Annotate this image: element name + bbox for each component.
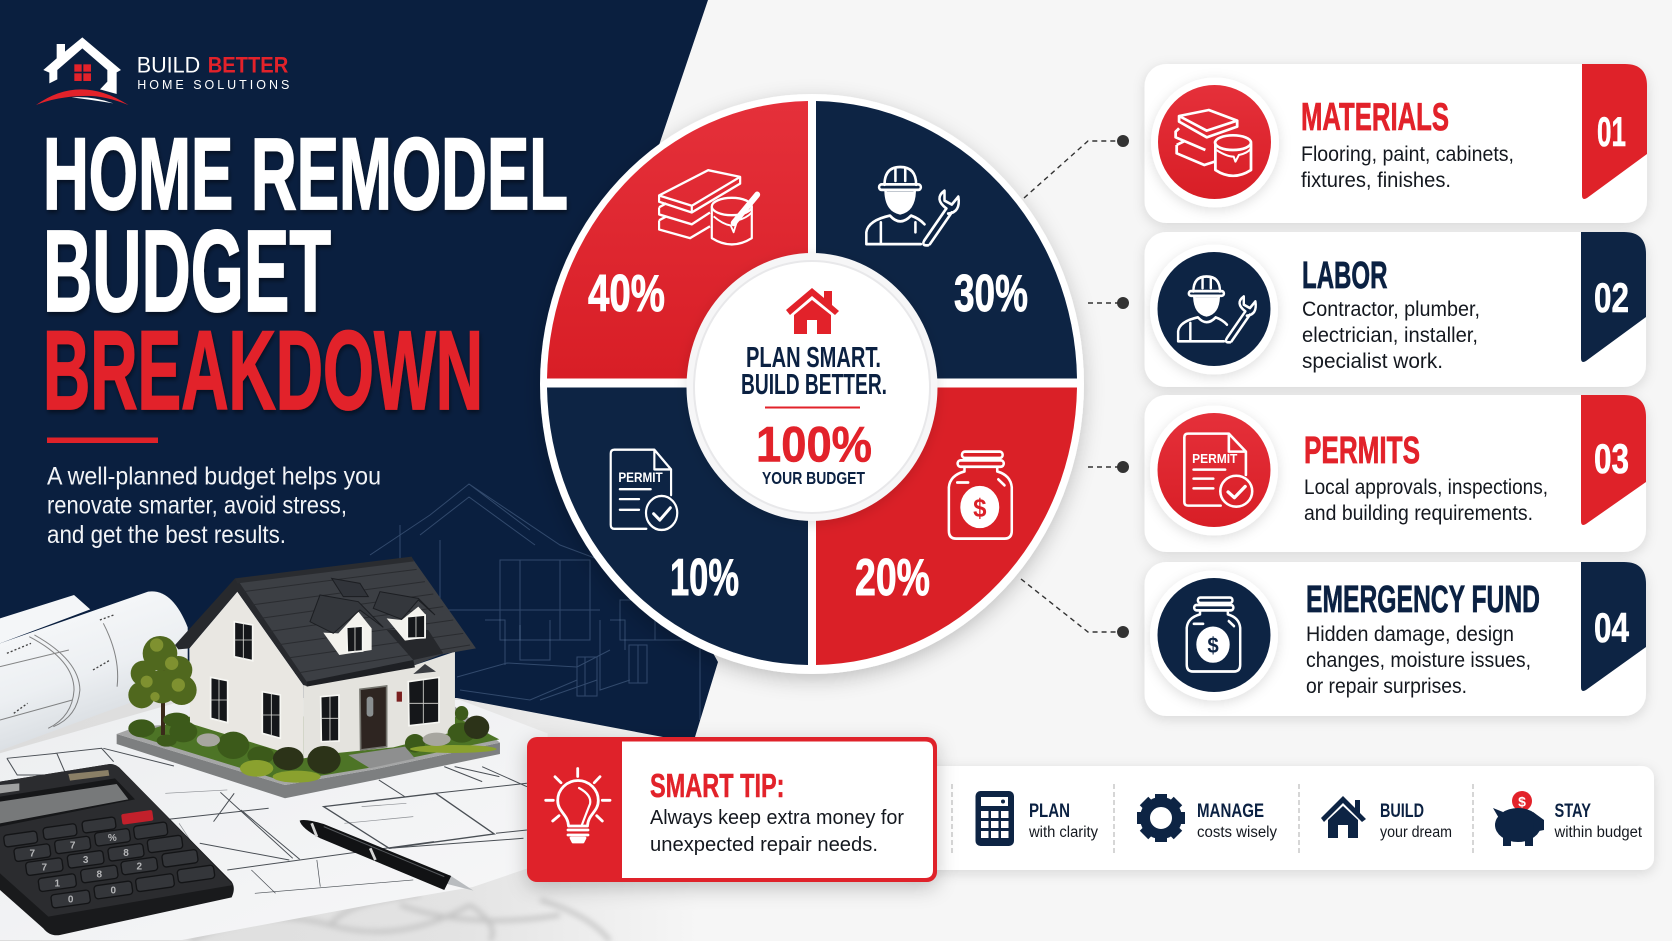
- title: BREAKDOWN: [43, 308, 483, 433]
- logo: HOME SOLUTIONS: [137, 78, 289, 92]
- item: plan: [976, 791, 1098, 846]
- subtitle: A well-planned budget helps you: [47, 462, 381, 490]
- description: electrician, installer,: [1302, 323, 1478, 347]
- brand name: BUILD: [137, 52, 200, 77]
- item: manage: [1137, 794, 1277, 842]
- description: [1302, 297, 1480, 373]
- segment: labor 30%: [816, 101, 1077, 378]
- slogan: BUILD BETTER.: [741, 369, 887, 401]
- calculator: 8: [123, 848, 129, 859]
- calculator: %: [108, 833, 117, 844]
- number ribbon 01: [1582, 64, 1647, 199]
- item: stay: [1493, 791, 1643, 846]
- tip text: unexpected repair needs.: [650, 833, 878, 856]
- subtitle: renovate smarter, avoid stress,: [47, 492, 347, 520]
- item: stay: STAY: [1554, 800, 1591, 822]
- panel: materials: [1144, 64, 1647, 223]
- icon: savings jar: [949, 452, 1012, 539]
- photo: blueprints, house model, calculator and pen: [0, 557, 548, 940]
- calculator: 0: [111, 886, 117, 897]
- connector: labor: [1088, 297, 1129, 309]
- icon badge: permits: PERMIT: [1192, 451, 1237, 466]
- title: HOME REMODEL: [43, 117, 568, 231]
- rolled blueprints: [0, 591, 188, 751]
- panel: emergency fund: [1144, 562, 1646, 716]
- heading: LABOR: [1302, 255, 1388, 297]
- value: 30%: 30%: [954, 265, 1028, 323]
- callout: smart tip: [527, 737, 937, 882]
- value: 20%: 20%: [855, 549, 930, 607]
- logo: BETTER: [208, 52, 288, 77]
- description: or repair surprises.: [1306, 674, 1467, 698]
- pen: [300, 820, 474, 891]
- donut budget chart: [540, 94, 1084, 674]
- calculator: 3: [83, 855, 89, 866]
- number ribbon 02: [1581, 232, 1646, 362]
- number ribbon 02: 02: [1594, 274, 1629, 321]
- panel: bottom benefit strip: [900, 766, 1654, 870]
- description: fixtures, finishes.: [1301, 168, 1451, 192]
- connector: materials: [1024, 135, 1129, 198]
- blueprint sheet: [0, 700, 548, 940]
- description: [1306, 622, 1531, 698]
- description: [1301, 142, 1514, 192]
- slogan: PLAN SMART.: [746, 342, 881, 374]
- icon: logo house: [36, 37, 128, 105]
- tip text: Always keep extra money for: [650, 806, 904, 829]
- icon: house: [786, 288, 839, 334]
- description: Flooring, paint, cabinets,: [1301, 142, 1514, 166]
- tip text: [650, 806, 904, 856]
- title divider: [47, 438, 158, 443]
- item: build: BUILD: [1380, 800, 1424, 822]
- item: manage: costs wisely: [1197, 824, 1277, 841]
- number ribbon 03: [1581, 395, 1646, 525]
- number ribbon 04: [1581, 562, 1646, 691]
- icon badge: emergency fund: $: [1207, 633, 1219, 658]
- subtitle: and get the best results.: [47, 521, 286, 549]
- heading: EMERGENCY FUND: [1306, 579, 1540, 621]
- calculator: 0: [68, 895, 74, 906]
- panel: permits: [1144, 395, 1646, 552]
- item: build: [1321, 796, 1452, 841]
- heading: SMART TIP:: [650, 767, 784, 804]
- description: changes, moisture issues,: [1306, 648, 1531, 672]
- heading: PERMITS: [1304, 430, 1420, 472]
- subtitle: [47, 462, 381, 549]
- icon: permit document: [611, 450, 677, 530]
- item: plan: with clarity: [1028, 824, 1098, 841]
- description: Local approvals, inspections,: [1304, 475, 1548, 499]
- description: and building requirements.: [1304, 501, 1533, 525]
- heading: MATERIALS: [1301, 96, 1449, 139]
- logo: [36, 37, 289, 105]
- calculator: 7: [70, 841, 76, 852]
- icon badge: labor: [1150, 244, 1278, 374]
- icon: materials: [659, 170, 757, 244]
- value: 40%: 40%: [588, 265, 665, 323]
- panel: labor: [1144, 232, 1646, 387]
- segment: materials 40%: [547, 101, 808, 378]
- calculator: 1: [55, 878, 61, 889]
- title: [43, 117, 568, 433]
- icon: worker: [866, 167, 959, 245]
- house model: [117, 557, 500, 798]
- number ribbon 01: 01: [1597, 108, 1626, 155]
- connector: permits: [1088, 461, 1129, 473]
- icon: calculator: [976, 791, 1014, 846]
- center hub: [686, 253, 938, 521]
- description: specialist work.: [1302, 349, 1443, 373]
- icon badge: materials: [1151, 78, 1279, 208]
- calculator: [0, 764, 234, 935]
- icon badge: emergency fund: [1150, 570, 1278, 700]
- total: 100% your budget: YOUR BUDGET: [762, 468, 865, 488]
- marble tabletop: [0, 690, 700, 941]
- item: stay: within budget: [1554, 824, 1643, 841]
- description: Contractor, plumber,: [1302, 297, 1480, 321]
- icon badge: permits: [1150, 406, 1278, 536]
- item: build: your dream: [1380, 824, 1452, 841]
- segment: emergency fund 20%: [816, 388, 1077, 665]
- total: 100% your budget: 100%: [756, 416, 872, 472]
- icon: piggy bank: [1493, 791, 1544, 846]
- icon: piggy bank: $: [1518, 794, 1526, 810]
- navy diagonal panel: [0, 0, 718, 737]
- number ribbon 04: 04: [1594, 604, 1629, 651]
- calculator: 7: [42, 862, 48, 873]
- connector: emergency fund: [1021, 579, 1129, 638]
- item: plan: PLAN: [1029, 800, 1070, 822]
- calculator: 2: [137, 862, 143, 873]
- icon: light bulb: [546, 768, 610, 842]
- value: 10%: 10%: [670, 549, 739, 607]
- slogan: [741, 342, 887, 401]
- icon: savings jar: $: [973, 494, 987, 523]
- title: BUDGET: [43, 206, 331, 336]
- blueprint wireframe house: [370, 484, 700, 720]
- segment: permits 10%: [547, 388, 808, 665]
- icon: gear: [1137, 794, 1185, 842]
- item: manage: MANAGE: [1197, 800, 1264, 822]
- description: Hidden damage, design: [1306, 622, 1514, 646]
- icon: permit document: PERMIT: [618, 470, 663, 485]
- calculator: 7: [30, 848, 36, 859]
- calculator: 8: [97, 870, 103, 881]
- number ribbon 03: 03: [1594, 435, 1629, 482]
- description: [1304, 475, 1548, 525]
- icon: house: [1321, 796, 1366, 838]
